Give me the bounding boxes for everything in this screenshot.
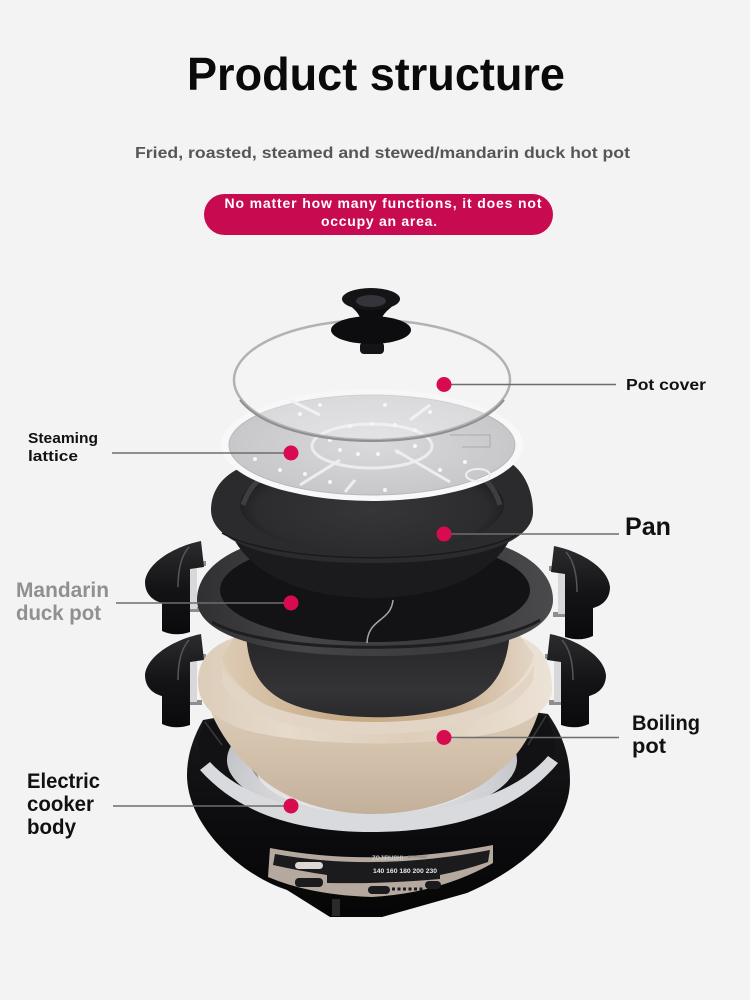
control panel: ZOJIRUSHI [372, 856, 403, 862]
label: boiling pot [436, 712, 700, 758]
label: pan: Pan [625, 513, 671, 541]
label: steaming lattice [28, 430, 298, 465]
label: electric cooker body: body [27, 816, 76, 839]
label: electric cooker body: cooker [27, 793, 94, 816]
callout pill [204, 194, 553, 235]
label: mandarin duck pot [16, 579, 298, 625]
callout pill: occupy an area. [321, 213, 437, 229]
label: electric cooker body: Electric [27, 770, 100, 793]
label: steaming lattice: lattice [28, 448, 78, 465]
label: pot cover: Pot cover [626, 377, 706, 394]
label: electric cooker body [27, 770, 298, 839]
label: steaming lattice: Steaming [28, 430, 98, 447]
label: boiling pot: Boiling [632, 712, 700, 735]
boiling pot [198, 636, 552, 814]
mandarin duck pot handles [145, 541, 610, 639]
label: pot cover [436, 377, 706, 394]
control panel: 140 160 180 200 230 [373, 869, 438, 875]
label: mandarin duck pot: Mandarin [16, 579, 109, 602]
control panel [268, 845, 493, 897]
mandarin duck pot [197, 535, 553, 717]
label: boiling pot: pot [632, 735, 666, 758]
label: mandarin duck pot: duck pot [16, 602, 101, 625]
pot cover [234, 288, 510, 441]
subtitle: Fried, roasted, steamed and stewed/mandarin duck hot pot [135, 145, 631, 162]
label: pan [436, 513, 671, 542]
pot cover knob [331, 288, 411, 354]
electric cooker body [187, 690, 570, 917]
boiling pot handles [145, 634, 606, 727]
product: exploded hot pot [145, 288, 610, 917]
callout pill: No matter how many functions, it does not [224, 195, 542, 211]
title: Product structure [187, 48, 565, 100]
pan [211, 457, 533, 598]
steaming lattice [221, 389, 523, 501]
control panel: EP-PVH30C [408, 855, 428, 859]
